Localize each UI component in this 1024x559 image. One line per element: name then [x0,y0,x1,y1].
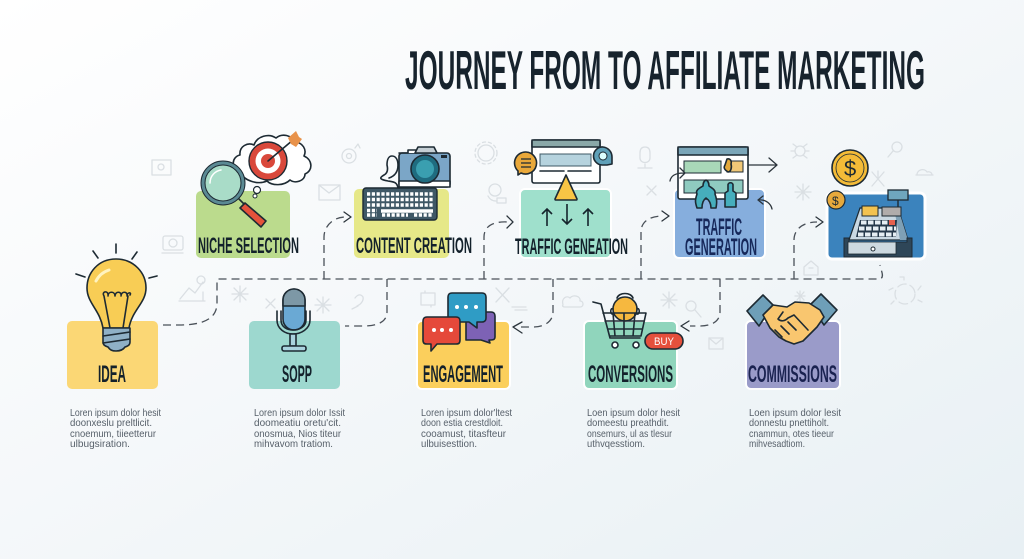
description: doon estia crestdloit. [421,417,503,429]
text: TRAFFIC GENEATION [515,234,628,259]
panel: traffic generation [515,140,628,259]
description: Loren ipsum dolor Issit [254,407,345,419]
label: CONTENT CREATION [356,233,472,258]
panel: niche selection: NICHE SELECTION [198,233,299,258]
panel: engagement: ENGAGEMENT [423,361,503,388]
arrow: outgoing [748,158,777,172]
icon: microphone [277,289,310,351]
description [254,407,345,450]
description: Loen ipsum dolor hesit [587,407,680,419]
dashed connector network [163,211,882,333]
description: cnammun, otes tieeur [749,428,834,440]
panel: content creation [354,147,472,258]
icon: camera [399,147,450,187]
icon: mouse and cable [381,156,398,188]
description [587,407,680,450]
icon: shopping cart with buy tag [593,294,683,349]
icon: dollar coin: $ [844,156,856,181]
icon: yellow triangle [555,175,577,200]
icon: handshake [747,294,837,344]
description: Loren ipsum dolor'ltest [421,407,512,419]
icon: keyboard [363,188,437,220]
card [354,189,449,258]
panel: traffic generation 2 [670,147,777,261]
description: Loren ipsum dolor hesit [70,407,161,419]
icon: browser window [515,140,612,183]
description: Loen ipsum dolor lesit [749,407,841,419]
faint background icons [152,142,933,349]
panel: sopp [249,289,345,450]
description: onsemurs, ul as tlesur [587,428,672,440]
label: COMMISSIONS [748,361,837,388]
description: domeestu preathdit. [587,417,669,429]
card [249,321,340,389]
panel: conversions [584,294,683,450]
description: ulbuisesttion. [421,438,477,450]
description: doomeatiu oretu'cit. [254,417,341,429]
icon: cash register [844,190,912,257]
panel: idea [67,244,161,450]
icon: small coin: $ [832,194,839,208]
description: mihvesadtiom. [749,438,805,450]
panel: commissions [746,294,841,450]
icon: website layout [678,147,748,208]
label: TRAFFIC [696,214,742,241]
panel: traffic generation 2: GENERATION [685,234,757,261]
icon: light bulb [76,244,157,351]
description: donnestu pnettiholt. [749,417,829,429]
panel: cash register [827,150,925,259]
card [584,321,677,389]
card [674,189,765,258]
description: onosmua, Nios titeur [254,428,341,440]
panel: idea: IDEA [98,361,126,388]
panel: engagement [417,293,512,450]
icon: up and down arrows [542,204,593,226]
icon: magnifying glass [203,163,266,227]
description: ulbugsiration. [70,438,130,450]
description: doonxeslu preltlicit. [70,417,152,429]
icon: thought cloud with target [233,131,311,198]
icon: chat bubbles [423,293,495,351]
panel: sopp: SOPP [282,361,312,388]
card [417,321,510,389]
card [746,321,840,389]
label [685,214,757,261]
description: uthvqesstiom. [587,438,645,450]
description [421,407,512,450]
arrow: curved left [670,168,772,209]
description: cooamust, titasfteur [421,428,506,440]
panel: conversions: CONVERSIONS [588,361,673,388]
description: cnoemum, tiieetterur [70,428,156,440]
icon: shopping cart with buy tag: BUY [654,336,675,348]
card [67,321,158,389]
description [70,407,161,450]
description [749,407,841,450]
card [520,189,611,258]
description: mihvavom tratiom. [254,438,333,450]
card [196,191,290,258]
panel: niche selection [196,131,311,258]
card [827,193,925,259]
